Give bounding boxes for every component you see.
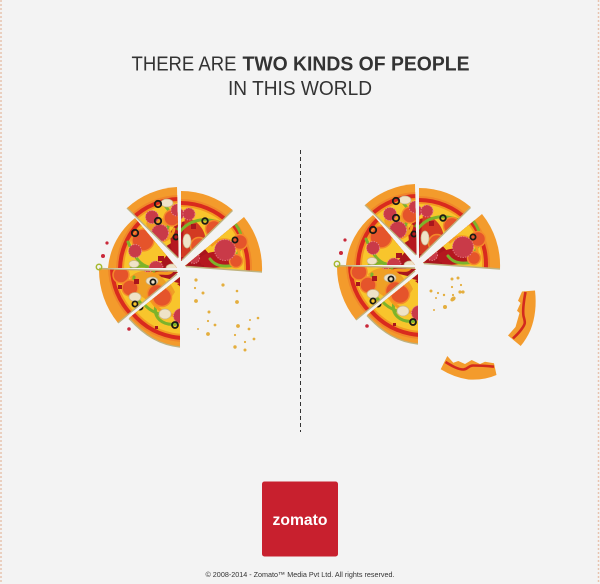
left pizza: two slices eaten with crusts gone bbox=[96, 183, 272, 355]
copyright footer: © 2008-2014 - Zomato™ Media Pvt Ltd. All rights reserved. bbox=[206, 570, 394, 579]
crumbs left bbox=[194, 278, 259, 352]
dashed divider bbox=[300, 150, 302, 432]
title bbox=[132, 54, 470, 100]
right dotted border bbox=[598, 0, 600, 584]
crumbs right bbox=[430, 276, 465, 311]
right pizza: two slices eaten with crusts left behind bbox=[334, 180, 536, 380]
title: TWO KINDS OF PEOPLE bbox=[242, 54, 470, 76]
title: THERE ARE bbox=[132, 54, 236, 76]
zomato logo: zomato bbox=[272, 512, 328, 529]
crust piece: right bbox=[508, 290, 536, 346]
title: IN THIS WORLD bbox=[228, 78, 372, 100]
crust piece: bottom bbox=[441, 356, 496, 380]
left dotted border bbox=[0, 0, 2, 584]
zomato logo bbox=[262, 482, 338, 556]
